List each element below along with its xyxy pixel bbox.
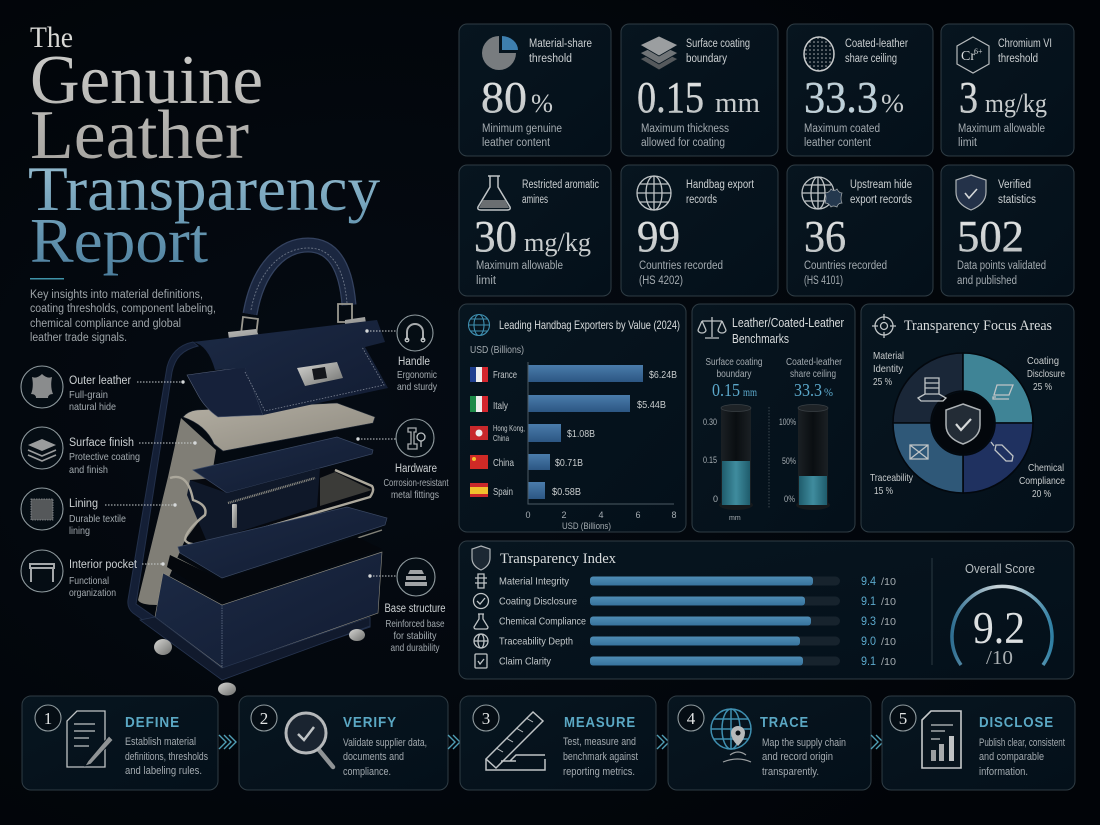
title: Report [30,205,208,276]
icon: globe with pin [711,709,751,762]
segment labels [870,350,1065,500]
stat card: coated-leather share ceiling: share ceiling [845,53,897,65]
stat card: coated-leather share ceiling: Maximum coated [804,123,880,135]
callout: outer leather: Full-grain [69,389,108,401]
callout: base structure: for stability [394,630,437,642]
title: Transparency [28,153,380,224]
callout: hardware: Corrosion-resistant [384,477,449,489]
callout: surface finish: Protective coating [69,451,140,463]
callout: lining: Durable textile [69,513,126,525]
benchmark values: mm [743,385,757,399]
bar chart: $1.08B [567,428,595,440]
intro paragraph [30,289,216,344]
arrow: measure to trace [657,735,669,749]
cream lining back [138,418,216,605]
stat card: handbag export records [621,165,778,296]
step: define: and labeling rules. [125,765,202,777]
country names: Italy [493,400,509,412]
country names [493,369,525,498]
bar chart: 0 [525,510,531,520]
stat card: material-share threshold: Material-share [529,38,592,50]
stat card: verified statistics [941,165,1074,296]
title: Leather [30,97,249,174]
gauge scales: 100% [779,417,796,427]
stat card: upstream hide export records: Upstream hide [850,179,912,191]
callout: outer leather: natural hide [69,401,116,413]
stat card: material-share threshold: leather content [482,137,551,149]
segment labels: Material [873,350,904,362]
step: disclose [882,696,1075,790]
bar chart [525,362,677,531]
row labels: Traceability Depth [499,636,573,648]
panel: leather and coated-leather benchmarks [692,304,855,532]
step: trace: Map the supply chain [762,737,846,749]
step number [251,705,277,731]
stat card: verified statistics: statistics [998,194,1036,206]
flag: France [470,367,488,382]
step: define: Establish material [125,736,196,748]
cylinder gauge: 33.3 percent [796,404,830,510]
country names: China [493,457,514,469]
step: define [22,696,218,790]
title accent rule [30,278,64,280]
step: measure [460,696,656,790]
step: trace: transparently. [762,766,819,778]
callout: handle: Handle [398,356,430,368]
stat card: surface coating boundary: Maximum thickness [641,123,729,135]
overall score gauge: 9.2 [973,603,1025,653]
stat card: material-share threshold: % [531,89,553,118]
panel title: Leather/Coated-Leather [732,316,844,330]
callout: base structure: and durability [390,642,440,654]
icon: report document [922,711,961,768]
row labels: Claim Clarity [499,656,552,668]
segment labels: Coating [1027,355,1059,367]
callout: outer leather [21,366,185,413]
stat card: chromium VI threshold: Chromium VI [998,38,1052,50]
callout: interior pocket: Interior pocket [69,559,138,571]
overall score gauge [952,562,1052,669]
stat card: coated-leather share ceiling [787,24,933,156]
segment labels: Traceability [870,472,914,484]
callout: base structure: Base structure [384,603,446,615]
segment labels: 15 % [874,485,893,497]
stat card: material-share threshold: Minimum genuine [482,123,562,135]
step number [678,705,704,731]
callout: interior pocket: Functional [69,575,109,587]
panel: leading handbag exporters [459,304,686,532]
callout: lining: Lining [69,498,98,510]
stat card: chromium VI threshold [941,24,1074,156]
donut segment icons [910,378,1013,461]
intro paragraph: leather trade signals. [30,332,127,344]
stat card: chromium VI threshold: threshold [998,53,1038,65]
step: verify [239,696,448,790]
stat card: restricted aromatic amines [459,165,611,296]
benchmark values: 33.3 [794,380,822,400]
intro paragraph: coating thresholds, component labeling, [30,303,216,315]
row icons [474,574,488,668]
stat card: material-share threshold: threshold [529,53,572,65]
step number [35,705,61,731]
bag back panel [128,342,370,677]
index scores: 9.0 [861,634,876,648]
step: verify: compliance. [343,766,391,778]
step number: 2 [260,709,268,728]
step: trace: and record origin [762,751,833,763]
step number [473,705,499,731]
step: define: DEFINE [125,714,180,731]
segment labels: Compliance [1019,475,1065,487]
stat card: restricted aromatic amines: Restricted aromatic [522,179,599,191]
step number: 3 [482,709,490,728]
stat card: chromium VI threshold: limit [958,137,978,149]
stat card: upstream hide export records: 36 [804,212,846,261]
bar chart: USD (Billions) [562,521,611,531]
stat card: verified statistics: Verified [998,179,1031,191]
bar chart: 6 [635,510,641,520]
bar chart: $0.58B [552,486,581,498]
panel: transparency focus areas [861,304,1074,532]
exploded handbag illustration [128,245,388,696]
benchmark values: % [824,385,833,399]
gauge scales: 0 [713,494,718,504]
stat card: restricted aromatic amines: amines [522,194,548,206]
base plate [140,617,370,680]
callout: handle: and sturdy [397,381,438,393]
stat card: surface coating boundary: Surface coating [686,38,750,50]
country names: Spain [493,486,513,498]
gauge scales: 0% [784,494,795,504]
flag: Spain [470,483,488,497]
callout: hardware [356,419,449,501]
step: trace [668,696,871,790]
stat card: upstream hide export records: export records [850,194,912,206]
index scores [861,574,896,668]
callout: base structure [368,558,446,654]
base interior [167,537,382,602]
cream lining flap [183,403,375,451]
icon: target [872,314,896,338]
stat card: restricted aromatic amines: 30 [474,212,517,261]
cream tray rim [170,470,373,544]
callout: lining [21,488,177,537]
stat card: coated-leather share ceiling: % [881,89,904,118]
callout: handle [365,315,438,393]
index scores: /10 [881,596,896,608]
bar chart: 2 [561,510,567,520]
bar chart: $0.71B [555,457,583,469]
step: measure: MEASURE [564,714,636,731]
stat card: coated-leather share ceiling: leather content [804,137,872,149]
step: measure: benchmark against [563,751,638,763]
stat card: chromium VI threshold: 6+ [974,47,983,56]
shield check icon [946,404,980,444]
donut chart [893,353,1033,493]
callout: surface finish: and finish [69,464,108,476]
stat card: handbag export records: records [686,194,717,206]
step: disclose: and comparable [979,751,1044,763]
stat card: upstream hide export records [787,165,933,296]
bar chart: $5.44B [637,399,666,411]
step: verify: documents and [343,751,404,763]
metal feet [154,629,365,696]
callout: surface finish [21,427,197,476]
base rim [171,530,382,582]
title [28,21,380,276]
icon: document with pencil [67,711,113,767]
bag handle [228,245,366,339]
icon: magnifier [286,713,333,767]
navy shelf [193,437,373,493]
panel title: Benchmarks [732,332,789,346]
benchmark labels: share ceiling [790,368,836,380]
index scores: /10 [881,636,896,648]
stat card: surface coating boundary: 0.15 [637,73,704,122]
segment labels: 25 % [1033,381,1052,393]
gauge scales [703,417,796,522]
title: Genuine [30,42,263,119]
stat card: verified statistics: Data points validated [957,260,1046,272]
step: disclose: Publish clear, consistent [979,737,1065,749]
step: disclose: information. [979,766,1028,778]
chart title: Leading Handbag Exporters by Value (2024) [499,318,680,332]
tray inner wall [320,472,372,506]
stat card: chromium VI threshold: 3 [959,73,978,122]
benchmark values: 0.15 [712,380,740,400]
country names: China [493,433,509,443]
overall score gauge: /10 [986,647,1013,669]
callout: surface finish: Surface finish [69,437,134,449]
segment labels: Identity [873,363,904,375]
step number: 4 [687,709,696,728]
stat card: surface coating boundary: boundary [686,53,727,65]
stat card: surface coating boundary: allowed for coating [641,137,725,149]
arrow: verify to measure [448,735,460,749]
segment labels: 25 % [873,376,892,388]
top flap [193,320,388,415]
step: verify: Validate supplier data, [343,737,427,749]
intro paragraph: chemical compliance and global [30,318,181,330]
row labels: Chemical Compliance [499,616,586,628]
segment labels: Chemical [1028,462,1064,474]
arrow: trace to disclose [871,735,883,749]
stat card: restricted aromatic amines: mg/kg [524,228,591,257]
panel title: Transparency Focus Areas [904,318,1052,334]
panel: transparency index [459,541,1074,679]
gauge scales: mm [729,515,741,522]
gauge scales: 0.30 [703,417,717,427]
icon: scales [698,317,726,338]
step number [890,705,916,731]
stat card: surface coating boundary [621,24,778,156]
flag: China [470,455,488,469]
callout: hardware: metal fittings [391,489,439,501]
stat card: material-share threshold [459,24,611,156]
overall score gauge: Overall Score [965,562,1035,576]
bar chart: 8 [671,510,677,520]
stat card: coated-leather share ceiling: Coated-leather [845,38,908,50]
lower flap piece [187,367,263,417]
step: trace: TRACE [760,714,809,731]
segment labels: Disclosure [1027,368,1065,380]
index scores: 9.1 [861,594,876,608]
gauge scales: 50% [782,456,796,466]
base box [155,552,382,668]
country names: France [493,369,517,381]
gauge scales: 0.15 [703,455,717,465]
stat card: chromium VI threshold: Cr [961,49,975,64]
interior pocket with zipper [187,468,320,542]
panel title: Transparency Index [500,551,616,567]
intro paragraph: Key insights into material definitions, [30,289,203,301]
stat card: restricted aromatic amines: limit [476,275,497,287]
stat card: surface coating boundary: mm [715,88,760,119]
stat card: handbag export records: Handbag export [686,179,755,191]
step number: 1 [44,709,52,728]
stat card: coated-leather share ceiling: 33.3 [804,73,878,122]
callout: hardware: Hardware [395,463,437,475]
stat card: upstream hide export records: Countries recorded [804,260,887,272]
icon: set square and ruler [486,712,545,770]
row labels: Coating Disclosure [499,596,577,608]
stat card: chromium VI threshold: Maximum allowable [958,123,1045,135]
flag: Hong Kong [470,426,488,440]
callout: outer leather: Outer leather [69,375,131,387]
callout: interior pocket: organization [69,587,116,599]
axis unit label: USD (Billions) [470,344,524,356]
callout: base structure: Reinforced base [386,618,445,630]
row labels [499,576,586,668]
stat card: verified statistics: 502 [957,212,1024,261]
benchmark values [712,380,833,400]
step: define: definitions, thresholds [125,751,208,763]
cylinder gauge: 0.15 mm [719,404,753,510]
index scores: /10 [881,576,896,588]
stat card: material-share threshold: 80 [481,73,527,122]
bar chart: 4 [598,510,604,520]
index scores: 9.3 [861,614,876,628]
stat card: restricted aromatic amines: Maximum allowable [476,260,563,272]
index bars [590,576,840,666]
stat card: handbag export records: 99 [637,212,680,261]
benchmark labels: Coated-leather [786,356,842,368]
index scores: /10 [881,656,896,668]
segment labels: 20 % [1032,488,1051,500]
stat card: chromium VI threshold: mg/kg [985,89,1047,118]
index scores: /10 [881,616,896,628]
step: disclose: DISCLOSE [979,714,1054,731]
row labels: Material Integrity [499,576,570,588]
benchmark labels: Surface coating [706,356,763,368]
arrow: define to verify [219,735,236,749]
callout: handle: Ergonomic [397,369,437,381]
index scores: 9.1 [861,654,876,668]
icon: globe [468,314,490,336]
benchmark labels: boundary [716,368,752,380]
benchmark labels [706,356,842,380]
step: verify: VERIFY [343,714,397,731]
tray interior [186,468,372,544]
step number: 5 [899,709,907,728]
callout: interior pocket [21,550,165,599]
stat card: handbag export records: (HS 4202) [639,275,683,287]
navy lower shelf [178,507,387,578]
icon: shield [472,546,490,570]
turn-lock clasp [297,362,343,386]
step: measure: Test, measure and [563,736,636,748]
step: measure: reporting metrics. [563,766,635,778]
stat card: verified statistics: and published [957,275,1017,287]
stat card: handbag export records: Countries recorded [639,260,723,272]
stat card: upstream hide export records: (HS 4101) [804,275,843,287]
title: The [30,21,73,54]
callout: lining: lining [69,525,90,537]
bar chart: $6.24B [649,369,677,381]
index scores: 9.4 [861,574,876,588]
flag: Italy [470,396,488,412]
panel title [732,316,844,346]
country names: Hong Kong, [493,423,525,433]
